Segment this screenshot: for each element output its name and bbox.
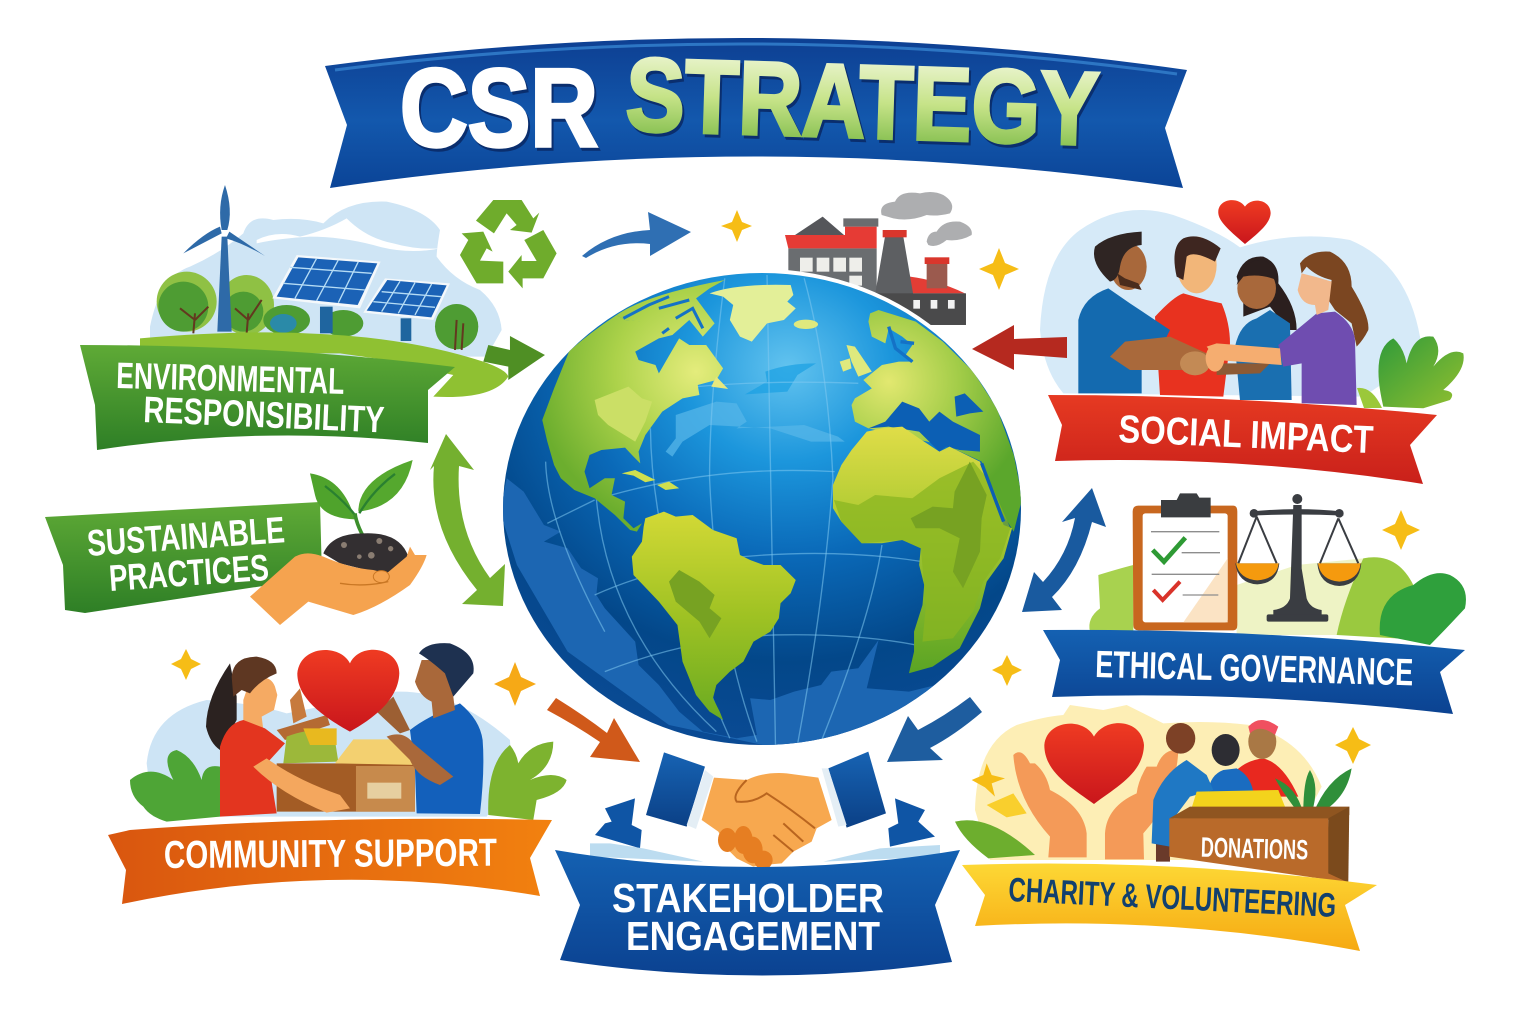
box leaves <box>1275 768 1352 815</box>
baltic <box>889 327 914 362</box>
leaf: small <box>1357 388 1382 408</box>
leaves right <box>488 742 567 820</box>
icon: wind turbine <box>183 185 265 332</box>
title text: CSR <box>400 47 598 170</box>
icon: solar panels <box>272 255 450 341</box>
icon: box with donations <box>277 728 420 812</box>
banner: social impact <box>1048 395 1437 484</box>
banner: community support <box>108 819 552 904</box>
donation items <box>1190 790 1288 815</box>
label: responsibility: RESPONSIBILITY <box>143 389 385 441</box>
icon: recycling symbol <box>460 200 557 288</box>
person one <box>1078 232 1170 393</box>
sparkle: charity right <box>1335 727 1371 764</box>
britain <box>846 345 872 377</box>
globe grid lines <box>546 275 922 745</box>
eurasia <box>852 310 1022 532</box>
arrow: red to globe <box>972 325 1067 370</box>
label: engagement: ENGAGEMENT <box>626 913 880 959</box>
icon: handshake <box>590 752 940 869</box>
banner: environmental responsibility <box>80 345 455 450</box>
banner: charity and volunteering <box>962 864 1377 951</box>
illustration: charity and volunteering <box>955 705 1352 883</box>
banner: ethical governance <box>1043 630 1465 714</box>
sparkle: community left <box>171 649 201 680</box>
label: community support: COMMUNITY SUPPORT <box>164 832 497 877</box>
arrow: blue double curve <box>1022 488 1106 612</box>
label: environmental: ENVIRONMENTAL <box>116 355 345 402</box>
label: practices: PRACTICES <box>108 547 270 599</box>
icon: heart <box>1218 200 1271 244</box>
sparkle: governance <box>1382 510 1420 550</box>
icon: caring hands <box>1013 750 1178 859</box>
box: donations <box>1169 807 1349 883</box>
icon: factory <box>785 192 972 325</box>
icon: heart <box>1044 723 1144 804</box>
banner: sustainable practices <box>45 502 322 613</box>
icon: hand holding seedling <box>250 460 427 625</box>
arrow: blue top <box>582 212 691 258</box>
south america <box>632 512 796 720</box>
banner: stakeholder engagement <box>555 850 960 976</box>
arrow: green double curve <box>430 434 505 606</box>
hispaniola <box>657 482 679 490</box>
illustration: social impact <box>1040 200 1464 408</box>
arctic channels <box>623 297 703 333</box>
africa mid tone <box>834 462 1010 642</box>
label: ethical governance: ETHICAL GOVERNANCE <box>1095 644 1414 694</box>
sparkle: factory right <box>979 248 1019 290</box>
label: donations: DONATIONS <box>1200 832 1309 865</box>
amazon dark tone <box>669 570 721 638</box>
leaves <box>1378 336 1464 408</box>
title text: STRATEGY <box>624 37 1101 168</box>
label: sustainable: SUSTAINABLE <box>86 509 286 564</box>
sparkle: globe lower right <box>992 655 1022 686</box>
illustration: ethical governance <box>1089 493 1466 645</box>
ireland <box>840 358 852 372</box>
arrow: blue to handshake <box>887 697 982 762</box>
arrow: orange to handshake <box>547 698 640 762</box>
yellow star glow <box>987 793 1027 817</box>
sparkle: top <box>721 210 752 242</box>
black sea <box>955 393 983 417</box>
north america <box>542 308 723 532</box>
leaves <box>955 820 1035 858</box>
person: woman <box>206 657 330 817</box>
africa dark tone <box>911 462 987 588</box>
title banner <box>325 37 1187 188</box>
interior highlight <box>595 387 652 442</box>
greenland <box>710 285 796 342</box>
person two <box>1155 236 1230 397</box>
illustration: community support <box>130 643 567 822</box>
icon: large heart <box>297 650 399 732</box>
label: charity and volunteering: CHARITY & VOLUNTEERING <box>1008 871 1337 925</box>
person: man <box>377 643 483 814</box>
north atlantic patches <box>745 363 816 394</box>
icon: clipboard <box>1133 493 1237 630</box>
sparkle: charity left <box>972 763 1005 797</box>
hillside <box>140 332 508 397</box>
icon: scales of justice <box>1235 494 1361 622</box>
person three <box>1235 257 1297 400</box>
arrow: green to globe <box>483 336 545 380</box>
iceland <box>794 320 818 329</box>
illustration: environmental scene <box>140 185 545 397</box>
title text <box>400 37 1101 170</box>
joined hands <box>1110 337 1282 375</box>
africa <box>833 427 1012 673</box>
woman forward arm <box>253 758 350 813</box>
cuba <box>622 470 655 482</box>
southern ocean shapes <box>500 478 936 747</box>
sparkle: community right <box>494 662 536 706</box>
atlantic highlights <box>666 402 845 457</box>
red sea <box>982 463 1004 522</box>
globe <box>499 269 1025 749</box>
arctic islands <box>617 280 725 337</box>
trees <box>157 272 478 350</box>
newfoundland <box>711 377 728 389</box>
person four <box>1278 251 1368 405</box>
label: stakeholder: STAKEHOLDER <box>612 875 884 921</box>
mediterranean <box>868 402 980 452</box>
label: social impact: SOCIAL IMPACT <box>1118 408 1374 462</box>
people group <box>1152 720 1298 862</box>
leaves left <box>130 750 220 822</box>
